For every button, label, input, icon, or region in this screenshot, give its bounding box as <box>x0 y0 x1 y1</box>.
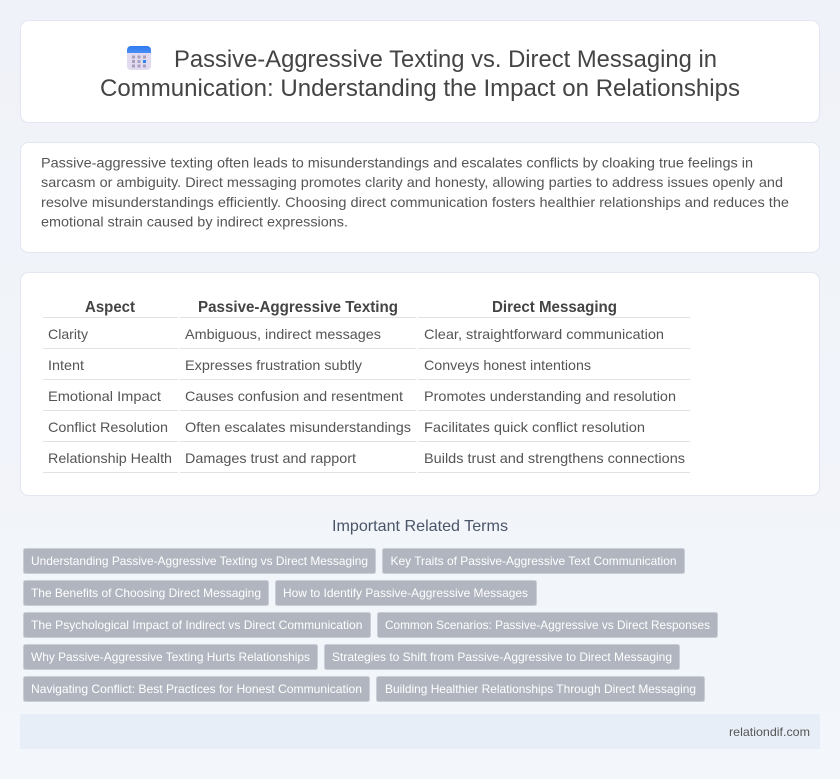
tag row 1: Understanding Passive-Aggressive Texting vs Direct Messaging <box>31 554 368 568</box>
table header row: Direct Messaging <box>492 299 617 316</box>
summary text block: Passive-aggressive texting often leads to misunderstandings and escalates conflicts by cloaking true feelings in <box>41 154 753 170</box>
tag row 3: Common Scenarios: Passive-Aggressive vs Direct Responses <box>385 618 710 632</box>
row: clarity: Clear, straightforward communication <box>424 326 664 342</box>
panel: related term tags <box>24 548 718 702</box>
row: conflict resolution: Often escalates misunderstandings <box>185 419 411 435</box>
row: emotional impact: Emotional Impact <box>48 388 161 404</box>
tag row 1 <box>24 548 684 574</box>
row: emotional impact: Causes confusion and resentment <box>185 388 403 404</box>
tag row 5 <box>24 676 704 702</box>
row: relationship health: Builds trust and strengthens connections <box>424 450 685 466</box>
title: Passive-Aggressive Texting vs. Direct Messaging in <box>174 46 717 73</box>
panel: header <box>20 20 820 122</box>
row: emotional impact <box>43 388 690 411</box>
panel: comparison table <box>20 272 820 496</box>
tag row 4: Strategies to Shift from Passive-Aggressive to Direct Messaging <box>332 650 672 664</box>
table header row: Passive-Aggressive Texting <box>198 299 398 316</box>
footer <box>20 714 820 749</box>
tag row 2: The Benefits of Choosing Direct Messaging <box>31 586 261 600</box>
table header row: Aspect <box>85 299 136 316</box>
row: emotional impact: Promotes understanding and resolution <box>424 388 676 404</box>
row: clarity <box>43 326 690 349</box>
row: relationship health <box>43 450 690 473</box>
row: intent: Expresses frustration subtly <box>185 357 362 373</box>
row: conflict resolution: Conflict Resolution <box>48 419 168 435</box>
row: conflict resolution <box>43 419 690 442</box>
row: clarity: Clarity <box>48 326 88 342</box>
summary text block: emotional strain caused by indirect expressions. <box>41 214 348 230</box>
tag row 5: Building Healthier Relationships Through Direct Messaging <box>385 682 696 696</box>
tag row 3: The Psychological Impact of Indirect vs Direct Communication <box>31 618 362 632</box>
panel: summary <box>20 142 820 252</box>
title <box>100 46 740 102</box>
summary text block <box>41 154 789 230</box>
tag row 1: Key Traits of Passive-Aggressive Text Communication <box>390 554 676 568</box>
title: Communication: Understanding the Impact on Relationships <box>100 75 740 102</box>
row: intent <box>43 357 690 380</box>
tag row 2: How to Identify Passive-Aggressive Messages <box>283 586 528 600</box>
tag row 4 <box>24 644 680 670</box>
row: intent: Intent <box>48 357 84 373</box>
table header row <box>43 299 690 318</box>
row: relationship health: Relationship Health <box>48 450 172 466</box>
summary text block: sarcasm or ambiguity. Direct messaging promotes clarity and honesty, allowing parties to address issues openly and <box>41 174 783 190</box>
tag row 3 <box>24 612 718 638</box>
tag row 5: Navigating Conflict: Best Practices for Honest Communication <box>31 682 362 696</box>
footer: relationdif.com <box>729 725 810 739</box>
summary text block: resolve misunderstandings efficiently. Choosing direct communication fosters healthier relationships and reduces the <box>41 194 789 210</box>
row: clarity: Ambiguous, indirect messages <box>185 326 381 342</box>
tag row 2 <box>24 580 536 606</box>
heading: important related terms: Important Related Terms <box>332 518 508 535</box>
row: intent: Conveys honest intentions <box>424 357 591 373</box>
tag row 4: Why Passive-Aggressive Texting Hurts Relationships <box>31 650 310 664</box>
icon: calendar <box>127 46 151 70</box>
row: conflict resolution: Facilitates quick conflict resolution <box>424 419 645 435</box>
row: relationship health: Damages trust and rapport <box>185 450 356 466</box>
